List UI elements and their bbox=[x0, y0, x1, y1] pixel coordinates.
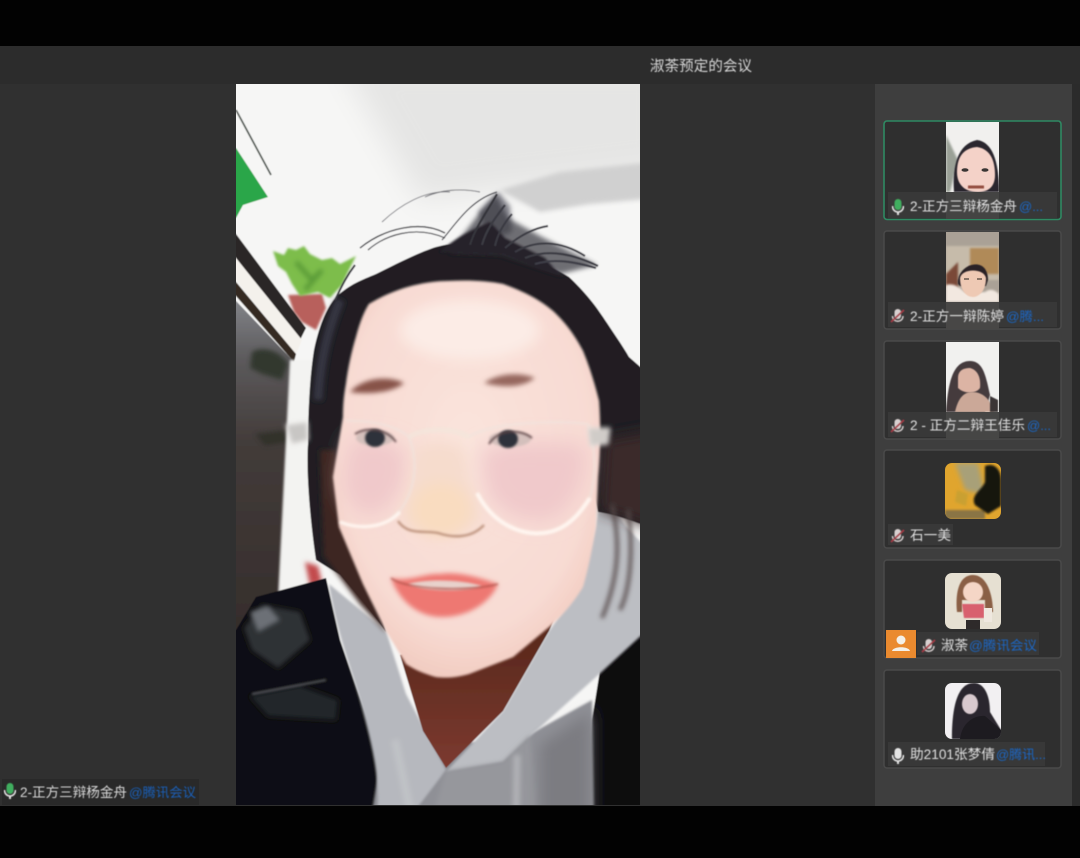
name 1: 2-正方三辩杨金舟 bbox=[910, 199, 1017, 214]
name 4: 石一美 bbox=[910, 528, 951, 543]
participant card 2 bbox=[884, 231, 1061, 329]
name bar 6 bbox=[888, 742, 1045, 766]
green wall decoration bbox=[236, 109, 272, 218]
name bar 2 bbox=[888, 302, 1057, 327]
green mic icon bbox=[4, 783, 16, 799]
hair tuft bbox=[335, 190, 598, 300]
muted mic icon 2 bbox=[891, 309, 904, 322]
potted plant bbox=[273, 246, 356, 330]
tag 1: @... bbox=[1019, 199, 1043, 214]
black top band bbox=[0, 0, 1080, 46]
speaker name text: 2-正方三辩杨金舟 bbox=[20, 785, 127, 800]
tag 6: @腾讯... bbox=[996, 747, 1046, 762]
nose bbox=[398, 442, 484, 537]
black jacket right bbox=[591, 634, 640, 805]
thumbnail video 3 bbox=[946, 342, 999, 412]
avatar 4 bbox=[945, 463, 1001, 519]
transparent glasses bbox=[286, 421, 610, 533]
participant card 6 bbox=[884, 670, 1061, 768]
participant card 5 bbox=[884, 560, 1061, 658]
mouth bbox=[391, 573, 498, 617]
neck bbox=[400, 615, 556, 768]
eyebrows bbox=[350, 374, 535, 393]
black leather jacket left bbox=[236, 578, 378, 805]
host badge bbox=[886, 630, 916, 658]
muted mic icon 5 bbox=[922, 639, 935, 652]
room wall and ceiling bbox=[236, 84, 640, 744]
eyes bbox=[355, 429, 532, 448]
door and frame bbox=[236, 233, 326, 632]
scrollbar strip bbox=[1072, 84, 1080, 806]
participant sidebar bbox=[875, 84, 1072, 806]
thumbnail video 2 bbox=[946, 232, 999, 302]
face bbox=[333, 281, 600, 678]
black bottom band bbox=[0, 806, 1080, 858]
participant card 1 bbox=[884, 121, 1061, 220]
muted mic icon 4 bbox=[891, 529, 904, 542]
name bar 5 bbox=[917, 632, 1039, 655]
name 5: 淑荼 bbox=[941, 638, 968, 653]
avatar 6 bbox=[945, 683, 1001, 739]
name bar 4 bbox=[888, 524, 953, 545]
avatar 5 bbox=[945, 573, 1001, 629]
participant card 3 bbox=[884, 341, 1061, 439]
main video: speaker bbox=[236, 84, 640, 805]
tag 3: @... bbox=[1027, 418, 1051, 433]
lens tint bbox=[342, 438, 586, 522]
meeting title: 淑荼预定的会议 bbox=[650, 58, 752, 75]
hair bbox=[307, 244, 660, 632]
green mic icon 1 bbox=[892, 199, 904, 215]
name 2: 2-正方一辩陈婷 bbox=[910, 308, 1004, 324]
participant card 4 bbox=[884, 450, 1061, 548]
tag 2: @腾... bbox=[1006, 309, 1044, 324]
white mic icon 6 bbox=[892, 748, 904, 764]
thumbnail video 1 bbox=[946, 122, 999, 192]
speaker name label bbox=[2, 779, 199, 805]
speaker tencent meeting tag: @腾讯会议 bbox=[129, 785, 196, 800]
name 3: 2 - 正方二辩王佳乐 bbox=[910, 418, 1025, 433]
muted mic icon 3 bbox=[891, 419, 904, 432]
name 6: 助2101张梦倩 bbox=[910, 747, 995, 762]
name bar 1 bbox=[888, 192, 1057, 218]
title bar bbox=[0, 46, 1080, 84]
grey hoodie bbox=[328, 512, 640, 805]
tag 5: @腾讯会议 bbox=[969, 638, 1037, 653]
name bar 3 bbox=[888, 412, 1057, 437]
main stage background bbox=[0, 84, 875, 806]
